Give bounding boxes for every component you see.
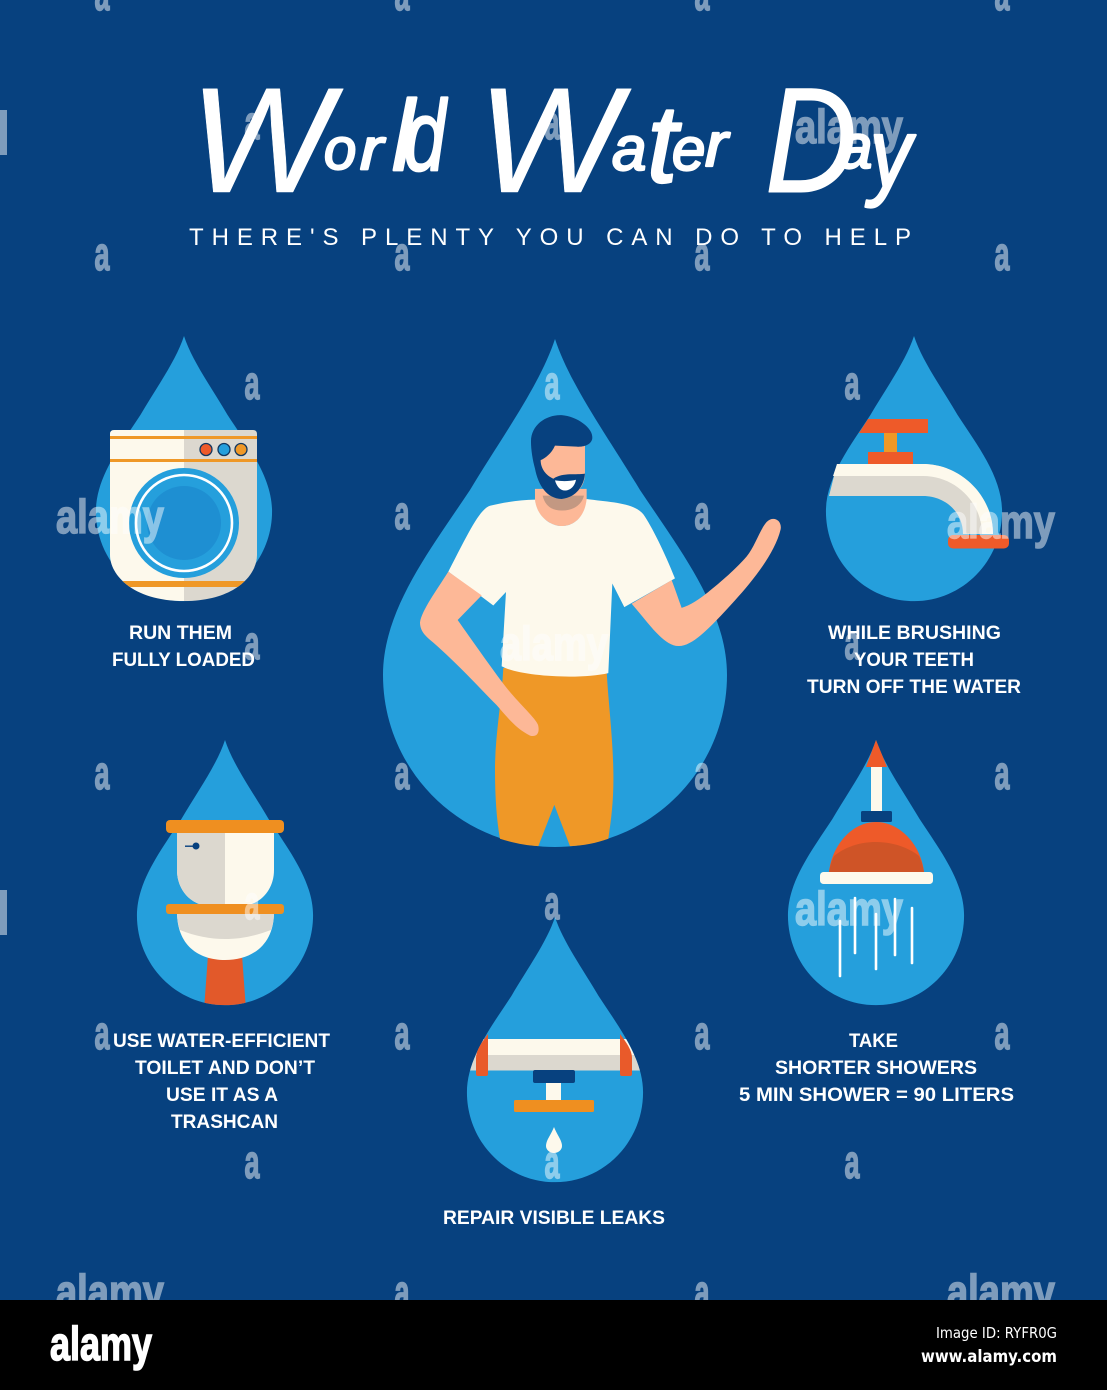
drop tip: [866, 740, 887, 767]
label: [807, 623, 1021, 698]
title: y: [865, 100, 917, 209]
lever: [185, 842, 200, 850]
label: USE IT AS A: [166, 1085, 278, 1106]
watermark: a: [844, 616, 860, 669]
arm: [871, 767, 882, 811]
right arm: [632, 519, 781, 646]
watermark: alamy: [947, 1265, 1055, 1318]
waste pipe: [204, 958, 246, 1006]
label: TAKE: [849, 1031, 898, 1052]
label: [739, 1031, 1014, 1106]
plate: [820, 872, 933, 884]
title: l: [392, 80, 417, 192]
collar: [861, 811, 892, 822]
watermark: a: [844, 356, 860, 409]
watermark: a: [94, 227, 110, 280]
website: www.alamy.com: [921, 1347, 1057, 1367]
machine body: [110, 430, 258, 602]
watermark: a: [394, 1265, 410, 1318]
panel: toilet: [113, 740, 330, 1133]
label: WHILE BRUSHING: [828, 623, 1001, 644]
seat: [166, 904, 284, 914]
watermark: a: [694, 227, 710, 280]
panel: washing machine: [96, 336, 272, 671]
title: a: [838, 113, 872, 182]
label: FULLY LOADED: [112, 650, 255, 671]
watermark: a: [544, 1135, 560, 1188]
label: [112, 623, 255, 671]
bowl: [177, 912, 274, 960]
watermark: a: [394, 1006, 410, 1059]
watermark: a: [94, 746, 110, 799]
label: RUN THEM: [129, 623, 232, 644]
title: W: [478, 56, 632, 224]
left collar: [476, 1034, 488, 1076]
spout: [948, 535, 1009, 548]
hair and beard: [531, 415, 592, 499]
valve stem: [546, 1083, 561, 1100]
door: [129, 468, 239, 578]
panel: leak: [443, 917, 665, 1229]
drop: [96, 336, 272, 601]
title: o: [324, 117, 356, 182]
footer bar: [0, 1300, 1107, 1390]
drop: [788, 740, 964, 1005]
left arm: [420, 572, 539, 736]
watermark: a: [994, 746, 1010, 799]
label: TOILET AND DON’T: [135, 1058, 315, 1079]
watermark: a: [394, 746, 410, 799]
title: [190, 56, 917, 224]
title: t: [647, 83, 682, 206]
watermark: a: [544, 356, 560, 409]
base: [868, 452, 913, 464]
watermark: alamy: [56, 490, 164, 543]
watermark: alamy: [56, 1265, 164, 1318]
image id: Image ID: RYFR0G: [936, 1324, 1057, 1342]
watermark: a: [994, 1006, 1010, 1059]
watermark: a: [694, 1006, 710, 1059]
label: TURN OFF THE WATER: [807, 677, 1021, 698]
watermark: a: [844, 1135, 860, 1188]
handle: [859, 419, 928, 433]
label: REPAIR VISIBLE LEAKS: [443, 1208, 665, 1229]
valve handle: [514, 1100, 594, 1112]
watermark: a: [544, 876, 560, 929]
label: [113, 1031, 330, 1133]
tap icon: [829, 419, 1009, 548]
footer logo: alamy: [50, 1317, 152, 1370]
pipe icon: [465, 1034, 645, 1153]
man illustration: [420, 415, 781, 846]
panel: central man in drop: [383, 339, 781, 847]
label: YOUR TEETH: [854, 650, 974, 671]
watermark: a: [694, 486, 710, 539]
t-shirt: [448, 499, 675, 677]
watermark: a: [994, 227, 1010, 280]
watermark: a: [244, 356, 260, 409]
label: USE WATER-EFFICIENT: [113, 1031, 330, 1052]
watermark: a: [94, 1006, 110, 1059]
watermark: alamy: [795, 100, 903, 153]
watermark: a: [394, 486, 410, 539]
watermark: a: [544, 96, 560, 149]
toilet icon: [166, 820, 284, 1010]
main water drop: [383, 339, 727, 847]
panel: tap: [807, 336, 1021, 698]
stem: [884, 433, 897, 452]
right collar: [620, 1034, 632, 1076]
washing machine icon: [110, 430, 258, 602]
pipe: [465, 1039, 645, 1070]
smile: [555, 480, 576, 491]
neck shadow: [543, 496, 584, 511]
water streams: [840, 898, 912, 976]
watermark: a: [244, 876, 260, 929]
title: a: [612, 115, 646, 184]
watermark: alamy: [947, 495, 1055, 548]
title: e: [672, 116, 705, 183]
watermark: a: [244, 96, 260, 149]
watermark: a: [244, 616, 260, 669]
watermark: a: [694, 746, 710, 799]
shower head: [829, 822, 924, 872]
buttons: [200, 444, 247, 456]
title: d: [404, 79, 448, 191]
title: r: [360, 116, 386, 182]
watermark: a: [394, 227, 410, 280]
label: 5 MIN SHOWER = 90 LITERS: [739, 1085, 1014, 1106]
pipe: [829, 464, 993, 534]
shower icon: [820, 740, 933, 976]
neck: [535, 489, 587, 526]
drop: [467, 917, 643, 1182]
drop: [826, 336, 1002, 601]
watermark: a: [694, 1265, 710, 1318]
watermark: alamy: [500, 617, 608, 670]
leaking drip: [546, 1127, 562, 1153]
title: D: [765, 57, 857, 224]
trousers: [495, 668, 613, 846]
subtitle: THERE'S PLENTY YOU CAN DO TO HELP: [189, 224, 911, 251]
face: [540, 443, 585, 496]
valve top: [533, 1070, 575, 1083]
tank: [177, 830, 274, 906]
panel: shower: [739, 740, 1014, 1106]
drop: [137, 740, 313, 1005]
tank lid: [166, 820, 284, 833]
title: W: [190, 56, 344, 224]
watermark: a: [244, 1135, 260, 1188]
title: r: [705, 110, 730, 179]
label: SHORTER SHOWERS: [775, 1058, 977, 1079]
watermark: alamy: [795, 882, 903, 935]
label: TRASHCAN: [171, 1112, 278, 1133]
